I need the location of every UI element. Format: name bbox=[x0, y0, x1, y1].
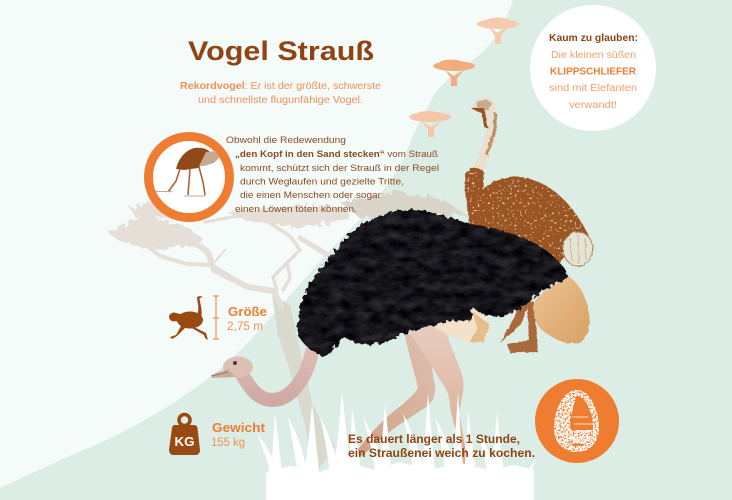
icon: acacia tree lower bbox=[409, 111, 451, 137]
tree branches bbox=[145, 216, 328, 306]
weight body bbox=[169, 425, 200, 455]
black body plumage bbox=[298, 210, 568, 357]
front leg bbox=[404, 322, 469, 472]
ostrich in ring bbox=[155, 148, 219, 196]
egg fact text: Es dauert länger als 1 Stunde, bbox=[348, 434, 520, 446]
icon: acacia tree middle bbox=[433, 60, 475, 86]
grass blades bbox=[257, 433, 280, 480]
paragraph: Kopf in den Sand: die einen Menschen oder sogar bbox=[240, 190, 381, 201]
illustrated brown ostrich bbox=[465, 97, 593, 353]
label: Größe: Größe bbox=[228, 304, 267, 319]
callout text: sind mit Elefanten bbox=[549, 83, 637, 94]
back leg bbox=[356, 332, 435, 456]
brown ostrich body bbox=[465, 167, 589, 262]
title: Vogel Strauß bbox=[188, 36, 374, 66]
paragraph: Kopf in den Sand bbox=[226, 135, 439, 215]
callout text bbox=[549, 33, 638, 111]
paragraph: Kopf in den Sand: einen Löwen töten können. bbox=[235, 204, 357, 215]
paragraph: Kopf in den Sand: kommt, schützt sich der Strauß in der Regel bbox=[240, 163, 439, 174]
neck bbox=[241, 352, 312, 400]
icon: egg in orange circle bbox=[535, 379, 619, 463]
icon: height ruler bbox=[213, 296, 219, 339]
intro text: Rekordvogel: Er ist der größte, schwerste bbox=[180, 80, 381, 92]
tree silhouette bbox=[107, 192, 468, 476]
icon: ostrich with head in sand bbox=[148, 136, 230, 218]
speckled egg bbox=[557, 393, 596, 449]
egg fact text: ein Straußenei weich zu kochen. bbox=[348, 448, 535, 460]
tail plumes bbox=[534, 276, 590, 344]
label: Gewicht: 155 kg bbox=[211, 435, 245, 449]
main ostrich photo bbox=[211, 210, 590, 472]
grass bbox=[257, 390, 538, 500]
white belly plumes bbox=[430, 305, 490, 343]
brown ostrich tail puff bbox=[563, 232, 593, 266]
brown ostrich legs bbox=[500, 288, 538, 353]
callout: Kaum zu glauben bbox=[530, 5, 656, 131]
background: light upper-left area bbox=[0, 0, 513, 488]
tree trunk bbox=[272, 295, 335, 476]
label: Gewicht: Gewicht bbox=[212, 420, 266, 435]
callout text: KLIPPSCHLIEFER bbox=[550, 66, 637, 78]
callout circle bbox=[530, 5, 656, 131]
orange circle bbox=[535, 379, 619, 463]
paragraph: Kopf in den Sand: Obwohl die Redewendung bbox=[226, 135, 346, 146]
ring bbox=[148, 136, 230, 218]
callout text: Die kleinen süßen bbox=[551, 50, 636, 61]
head bbox=[211, 356, 253, 378]
icon: acacia tree top bbox=[477, 18, 519, 44]
tree canopy bbox=[107, 192, 468, 250]
icon: running ostrich bbox=[169, 296, 208, 340]
paragraph: Kopf in den Sand: „den Kopf in den Sand stecken“ vom Strauß bbox=[235, 149, 438, 160]
grass base bbox=[266, 462, 534, 500]
brown ostrich neck and head bbox=[470, 97, 497, 170]
label: Größe: 2,75 m bbox=[227, 319, 263, 333]
label: Gewicht bbox=[211, 420, 266, 449]
weight text: KG bbox=[174, 434, 194, 449]
paragraph: Kopf in den Sand: durch Weglaufen und gezielte Tritte, bbox=[240, 176, 404, 188]
egg fact text bbox=[348, 434, 535, 460]
intro text bbox=[180, 80, 381, 106]
icon: KG weight bbox=[169, 414, 200, 455]
callout text: verwandt! bbox=[569, 100, 617, 111]
weight handle bbox=[179, 414, 190, 426]
callout text: Kaum zu glauben: bbox=[549, 33, 638, 44]
intro text: und schnellste flugunfähige Vogel. bbox=[198, 94, 363, 106]
label: Größe bbox=[227, 304, 267, 333]
